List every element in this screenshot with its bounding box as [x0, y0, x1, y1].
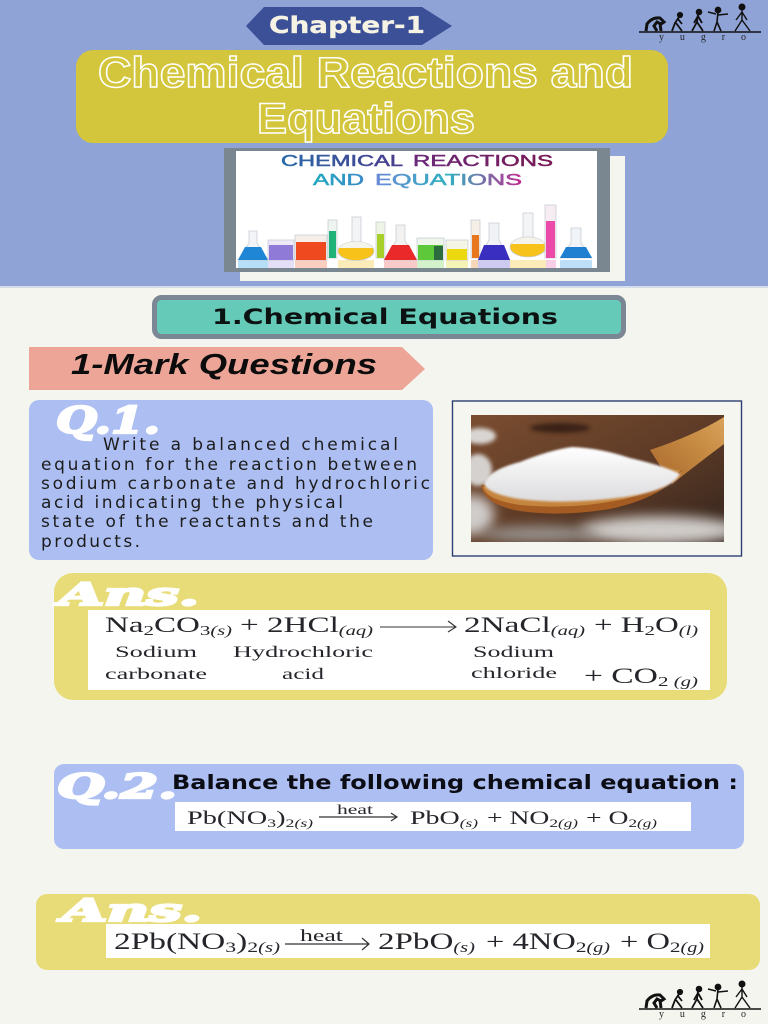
equation: answer 1: 2NaCl	[464, 612, 521, 637]
label: Q.2.: Q.2.	[57, 767, 177, 807]
equation: answer 1: acid	[282, 666, 324, 683]
equation: question 2: 2	[628, 816, 637, 830]
section heading: 1.Chemical Equations: 1.Chemical Equations	[212, 305, 558, 330]
equation: question 2: 2	[549, 816, 558, 830]
equation: question 2: (s)	[460, 817, 478, 830]
equation: answer 2: 3	[225, 940, 236, 956]
equation: answer 1: carbonate	[105, 666, 207, 683]
equation: answer 1: chloride	[471, 665, 557, 682]
chapter badge: Chapter-1	[269, 13, 425, 39]
equation: question 2: 2	[286, 816, 294, 830]
equation: question 2: + O	[586, 808, 615, 829]
equation: question 2: 3	[267, 816, 276, 830]
equation: question 2: heat	[337, 803, 373, 818]
question 1 text: equation for the reaction between	[41, 455, 417, 475]
equation: question 2	[175, 802, 691, 831]
question 1 text	[41, 435, 430, 552]
question 1 text: products.	[41, 532, 140, 552]
illustration heading: AND	[313, 172, 364, 189]
label: Ans.: Ans.	[56, 893, 202, 929]
illustration heading: CHEMICAL	[281, 153, 404, 170]
equation: answer 1: (l)	[679, 623, 699, 639]
banner: 1-Mark Questions	[29, 347, 425, 390]
equation: answer 1: (aq)	[551, 623, 586, 639]
equation: answer 2: 2	[576, 940, 586, 956]
equation: answer 1: 2	[645, 624, 655, 639]
illustration heading: EQUATIONS	[375, 172, 522, 189]
equation: answer 1: + H	[594, 612, 628, 637]
equation: question 2: + NO	[487, 808, 530, 829]
equation: answer 1: Na	[105, 612, 131, 637]
equation: answer 2: 2	[670, 940, 681, 956]
glassware	[238, 205, 592, 268]
equation: question 2: (g)	[637, 817, 657, 830]
question 2 text: Balance the following chemical equation :	[172, 771, 738, 794]
title second line: Equations	[257, 95, 475, 143]
equation: answer 2: (s)	[258, 940, 280, 956]
equation: answer 1: (g)	[669, 674, 699, 690]
equation: answer 1: (aq)	[339, 623, 374, 639]
logo: yugro bottom: y u g r o	[659, 1009, 746, 1020]
title panel	[76, 49, 668, 143]
equation: question 2: PbO	[410, 808, 444, 829]
equation: answer 1: O	[655, 612, 679, 637]
equation: answer 2: 2PbO	[378, 929, 430, 954]
illustration heading: REACTIONS	[413, 153, 553, 170]
equation: answer 2	[106, 924, 710, 958]
panel: question 1	[29, 400, 433, 560]
equation: answer 1: 2	[658, 675, 669, 690]
equation: answer 2: (g)	[681, 940, 704, 956]
equation: question 2: )	[276, 808, 286, 829]
equation: answer 1: CO	[154, 612, 200, 637]
equation: answer 2: (s)	[453, 940, 475, 956]
logo: yugro bottom	[639, 981, 761, 1020]
question 1 text: sodium carbonate and hydrochloric	[41, 474, 430, 494]
equation: answer 2: )	[236, 929, 247, 954]
equation: question 2: (s)	[294, 817, 313, 830]
header band	[0, 0, 768, 288]
panel: answer 1	[53, 573, 727, 700]
logo: yugro top	[639, 4, 761, 43]
equation: answer 1: Sodium	[473, 644, 555, 661]
photo: salt on wooden spoon	[450, 401, 742, 556]
panel: answer 2	[36, 893, 760, 970]
logo: yugro top: y u g r o	[659, 32, 746, 43]
equation: answer 2: + 4NO	[486, 929, 549, 954]
equation: answer 1: (s)	[210, 623, 233, 639]
equation: question 2: (g)	[558, 817, 578, 830]
equation: answer 1: Hydrochloric	[233, 644, 373, 661]
equation: answer 1: 3	[200, 624, 210, 639]
equation: answer 1	[88, 610, 710, 690]
equation: answer 2: 2Pb(NO	[114, 929, 191, 954]
equation: answer 1: Sodium	[115, 644, 198, 661]
title text: Chemical Reactions and	[98, 49, 633, 97]
chapter badge	[246, 7, 452, 45]
equation: answer 2: (g)	[586, 940, 610, 956]
chapter illustration	[224, 148, 625, 281]
banner: 1-Mark Questions: 1-Mark Questions	[71, 349, 377, 381]
equation: question 2: Pb(NO	[187, 808, 241, 829]
panel: question 2	[54, 764, 744, 849]
equation: answer 2: 2	[247, 940, 258, 956]
question 1 text: acid indicating the physical	[41, 493, 343, 513]
label: Q.1.: Q.1.	[56, 400, 160, 442]
illustration heading	[281, 153, 553, 189]
question 1 text: state of the reactants and the	[41, 512, 373, 532]
question 1 text: Write a balanced chemical	[103, 435, 398, 455]
equation: answer 1: 2	[144, 624, 154, 639]
equation: answer 2: heat	[300, 926, 343, 945]
equation: answer 2: + O	[620, 929, 655, 954]
equation: answer 1: + CO	[584, 663, 632, 688]
equation: answer 1: + 2HCl	[240, 612, 306, 637]
section heading: 1.Chemical Equations	[154, 298, 624, 336]
label: Ans.: Ans.	[53, 577, 199, 613]
